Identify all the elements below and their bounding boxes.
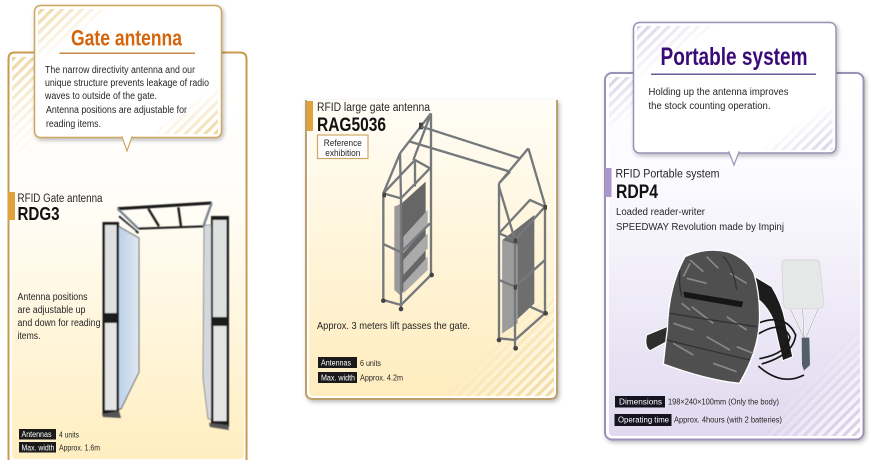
panel: gate antenna (8, 52, 246, 460)
badge: reference exhibition: Reference (324, 138, 362, 149)
badge: reference exhibition (318, 135, 368, 159)
callout description: The narrow directivity antenna and our (45, 65, 196, 76)
specs: RAG5036: Max. width (321, 374, 355, 382)
callout description: Holding up the antenna improves (648, 87, 788, 98)
specs: RAG5036: Approx. 4.2m (360, 374, 403, 382)
left tower (381, 113, 434, 311)
product title: RAG5036: RFID large gate antenna (317, 102, 431, 114)
text: positions note (18, 292, 100, 342)
specs: RDP4: Operating time (618, 414, 669, 424)
panel: gate antenna callout (34, 6, 222, 151)
specs: RDP4: 198×240×100mm (Only the body) (668, 396, 779, 406)
shoulder strap (755, 277, 793, 361)
specs: RDG3: 4 units (59, 430, 79, 440)
product title: RAG5036 (307, 101, 431, 136)
right pillar (203, 216, 229, 430)
callout description (44, 65, 209, 130)
callout description: unique structure prevents leakage of radio (45, 78, 209, 89)
bag body (663, 250, 760, 383)
heading: Portable system: Portable system (660, 43, 808, 71)
paddle antenna (782, 260, 824, 371)
product title: RDP4: RDP4 (616, 182, 658, 203)
text: positions note: items. (18, 331, 40, 342)
specs: RDG3: Approx. 1.6m (59, 444, 100, 452)
panel: large gate antenna (306, 100, 557, 399)
callout tail (729, 152, 739, 165)
heading: Gate antenna: Gate antenna (71, 26, 183, 50)
product title: RAG5036: RAG5036 (317, 115, 386, 136)
product title: RDG3: RFID Gate antenna (18, 193, 103, 205)
specs: RAG5036 (318, 357, 403, 383)
left pillar (102, 222, 139, 418)
specs: RDP4: Dimensions (619, 396, 662, 406)
text: lift note: Approx. 3 meters lift passes the gate. (317, 320, 470, 332)
specs: RDG3 (19, 429, 100, 452)
text: reader-writer description (616, 207, 784, 233)
product title: RDG3 (8, 192, 103, 224)
image: large gate frame (381, 113, 548, 351)
text: reader-writer description: SPEEDWAY Revolution made by Impinj (616, 222, 784, 233)
callout description: reading items. (46, 119, 101, 130)
right tower (497, 148, 548, 351)
badge: reference exhibition: exhibition (325, 148, 360, 159)
product title: RDP4: RFID Portable system (616, 168, 720, 180)
text: positions note: are adjustable up (18, 305, 86, 316)
product title: RDP4 (605, 168, 720, 203)
text: positions note: and down for reading (18, 318, 100, 329)
text: positions note: Antenna positions (18, 292, 88, 303)
text: reader-writer description: Loaded reader-writer (616, 207, 706, 218)
beams (410, 127, 520, 172)
callout description: Antenna positions are adjustable for (46, 105, 188, 116)
specs: RDP4 (614, 396, 782, 426)
zipper pocket (683, 292, 743, 307)
callout description (648, 87, 788, 112)
callout description: the stock counting operation. (648, 101, 770, 112)
cable (753, 320, 804, 379)
callout description: waves to outside of the gate. (44, 91, 157, 102)
callout tail (122, 137, 132, 151)
specs: RAG5036: 6 units (360, 359, 381, 368)
overhead frame (118, 203, 212, 233)
side strap (646, 326, 670, 351)
image: gate antenna RDG3 (102, 203, 229, 430)
panel: portable system callout (634, 22, 836, 165)
specs: RDG3: Max. width (22, 444, 54, 452)
product title: RDG3: RDG3 (18, 204, 60, 224)
specs: RDG3: Antennas (22, 430, 52, 439)
specs: RDP4: Approx. 4hours (with 2 batteries) (674, 414, 782, 424)
specs: RAG5036: Antennas (321, 358, 351, 368)
panel: portable system (605, 73, 864, 440)
image: backpack with antenna paddle (646, 250, 824, 383)
